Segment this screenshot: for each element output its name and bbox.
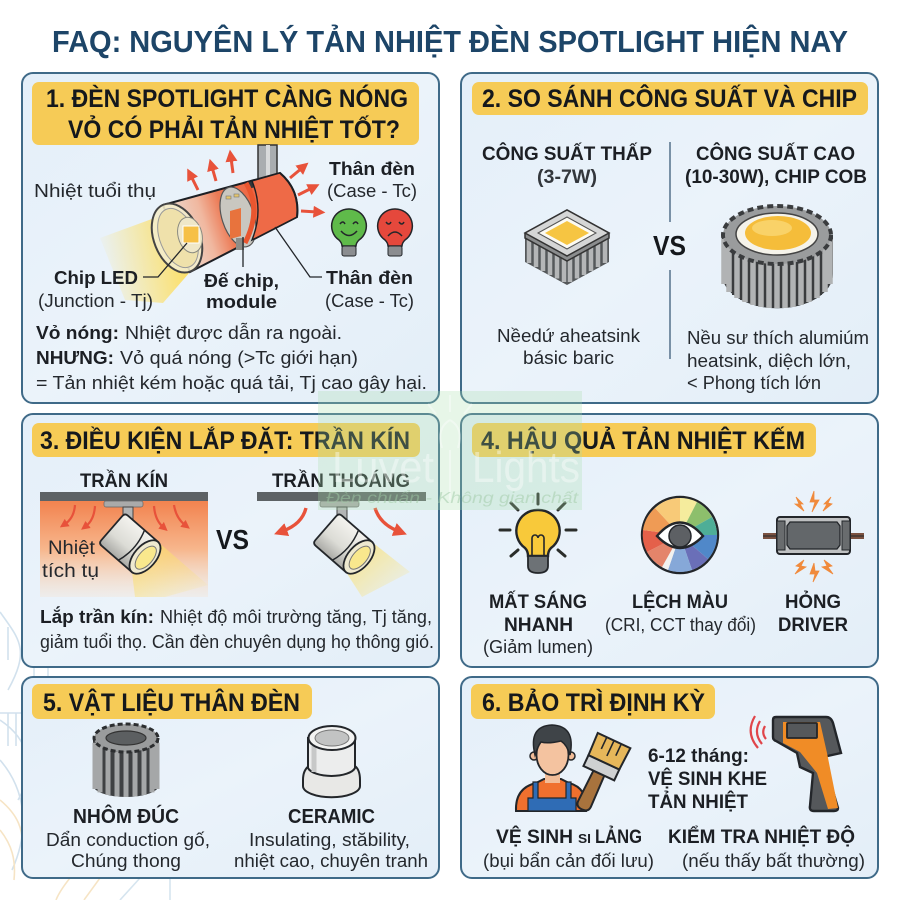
label: lumen loss: MẤT SÁNG — [489, 591, 587, 613]
heading 1: VỎ CÓ PHẢI TẢN NHIỆT TỐT? — [68, 114, 400, 144]
vs label: VS — [216, 524, 249, 555]
label: colour shift: LỆCH MÀU — [632, 591, 728, 613]
heading 1 — [32, 82, 419, 145]
background line art — [0, 612, 170, 900]
label: ceramic: CERAMIC — [288, 806, 375, 828]
label: case bottom: (Case - Tc) — [325, 291, 414, 311]
explanation text — [40, 606, 434, 652]
label: chip LED: (Junction - Tj) — [38, 291, 153, 311]
airflow arrows — [283, 508, 398, 531]
heading 3: 3. ĐIỀU KIỆN LẮP ĐẶT: TRẦN KÍN — [40, 425, 410, 455]
panel 6: maintenance — [461, 677, 878, 878]
label: cleaning — [483, 826, 654, 871]
label: cast aluminium: Dẩn conduction gố, — [46, 830, 210, 850]
heading 6: 6. BẢO TRÌ ĐỊNH KỲ — [482, 687, 705, 717]
label: cleaning: (bụi bẩn cản đối lưu) — [483, 851, 654, 871]
sparks — [795, 491, 833, 582]
panel 1: lamp heat — [22, 73, 439, 403]
icon: paint brush — [566, 733, 630, 817]
icon: light bulb — [500, 494, 576, 573]
low power title — [482, 143, 652, 188]
label: case bottom: Thân đèn — [326, 268, 413, 288]
label: cleaning: LẢNG — [595, 826, 642, 848]
heading 4: 4. HẬU QUẢ TẢN NHIỆT KẾM — [481, 425, 805, 455]
label: heat build-up — [42, 538, 99, 582]
label: temperature check: KIỂM TRA NHIỆT ĐỘ — [668, 826, 855, 848]
leader lines — [143, 227, 322, 277]
text: low power note: Nềedứ aheatsink — [497, 326, 641, 346]
text: low power note: básic baric — [523, 348, 614, 368]
icon: happy green bulb — [332, 209, 366, 256]
lamp stem — [258, 145, 277, 181]
heading 5: 5. VẬT LIỆU THÂN ĐÈN — [43, 687, 300, 717]
icon: small square heatsink — [525, 210, 609, 285]
label: ceramic: nhiệt cao, chuyên tranh — [234, 851, 428, 871]
label: chip LED — [38, 268, 153, 311]
label: chip base: Đế chip, — [204, 271, 279, 291]
label: case top: (Case - Tc) — [327, 181, 417, 201]
label: cast aluminium: Chúng thong — [71, 851, 181, 871]
spotlight cross-section — [142, 173, 297, 280]
light beam — [100, 216, 190, 303]
closed ceiling illustration — [40, 470, 208, 597]
label: life heat: Nhiệt tuổi thụ — [34, 181, 156, 201]
watermark — [318, 391, 582, 510]
open ceiling illustration: TRẦN THOÁNG — [272, 470, 410, 492]
watermark: Đèn chuẩn - Không gian chất — [326, 489, 579, 507]
icon: sad red bulb — [378, 209, 412, 256]
icon: aluminium gear heatsink — [93, 724, 159, 797]
label: case top — [327, 159, 417, 201]
icon: large round COB heatsink — [722, 206, 833, 308]
text: low power note — [497, 326, 641, 368]
label: case top: Thân đèn — [329, 159, 415, 179]
label: chip base — [204, 271, 279, 312]
label: lumen loss — [483, 591, 593, 657]
vs label: VS — [653, 230, 686, 261]
heat arrows — [191, 158, 317, 212]
explanation text: Lắp trần kín: — [40, 606, 154, 627]
label: colour shift: (CRI, CCT thay đổi) — [605, 615, 756, 635]
label: cast aluminium: NHÔM ĐÚC — [73, 804, 179, 828]
text: cleaning interval: TẢN NHIỆT — [648, 791, 748, 813]
explanation text: NHƯNG: — [36, 348, 114, 368]
label: heat build-up: tích tụ — [42, 561, 99, 582]
heading 2: 2. SO SÁNH CÔNG SUẤT VÀ CHIP — [482, 83, 857, 113]
low power title: CÔNG SUẤT THẤP — [482, 143, 652, 165]
high power title — [685, 143, 867, 188]
low power title: (3-7W) — [537, 167, 597, 188]
label: lumen loss: NHANH — [504, 615, 573, 636]
label: colour shift — [605, 591, 756, 635]
label: heat build-up: Nhiệt — [48, 538, 96, 559]
heat arrows — [65, 505, 185, 527]
open ceiling illustration — [257, 470, 426, 597]
text: high power note: heatsink, diệch lớn, — [687, 351, 851, 371]
text: cleaning interval — [648, 746, 767, 813]
watermark: Luvet — [332, 443, 434, 492]
text: cleaning interval: 6-12 tháng: — [648, 746, 749, 767]
label: temperature check — [668, 826, 865, 871]
title: FAQ: NGUYÊN LÝ TẢN NHIỆT ĐÈN SPOTLIGHT HIỆN NAY — [52, 23, 848, 59]
text: cleaning interval: VỆ SINH KHE — [648, 768, 767, 790]
icon: colour wheel eye — [642, 497, 718, 573]
icon: worker — [516, 725, 586, 811]
icon: burnt driver — [763, 491, 864, 582]
label: cleaning: SI — [578, 831, 591, 846]
text: high power note: < Phong tích lớn — [687, 373, 821, 393]
closed ceiling illustration: TRẦN KÍN — [80, 470, 168, 492]
high power title: CÔNG SUẤT CAO — [696, 143, 855, 165]
label: case bottom — [325, 268, 414, 311]
spotlight right — [313, 513, 380, 579]
explanation text: Nhiệt độ môi trường tăng, Tj tăng, — [160, 607, 432, 627]
label: ceramic: Insulating, stăbility, — [249, 830, 410, 850]
icon: ceramic body — [303, 726, 360, 797]
panel 4: consequences — [461, 414, 878, 667]
label: cleaning: VỆ SINH — [496, 826, 573, 848]
high power title: (10-30W), CHIP COB — [685, 167, 867, 188]
explanation text: Vỏ nóng: — [36, 323, 119, 343]
explanation text: = Tản nhiệt kém hoặc quá tải, Tj cao gây hại. — [36, 373, 427, 393]
watermark: Lights — [472, 443, 580, 492]
label: driver failure: DRIVER — [778, 615, 848, 636]
label: driver failure — [778, 591, 848, 636]
label: cast aluminium — [46, 804, 210, 871]
text: high power note — [687, 328, 869, 393]
label: chip LED: Chip LED — [54, 268, 138, 288]
label: driver failure: HỎNG — [785, 591, 841, 613]
label: lumen loss: (Giảm lumen) — [483, 637, 593, 657]
heading 1: 1. ĐÈN SPOTLIGHT CÀNG NÓNG — [46, 83, 408, 113]
explanation text: giảm tuổi thọ. Cần đèn chuyên dụng họ thông gió. — [40, 632, 434, 652]
label: chip base: module — [206, 292, 277, 312]
label: ceramic — [234, 806, 428, 871]
label: temperature check: (nếu thấy bất thường) — [682, 851, 865, 871]
panel 2: power comparison — [461, 73, 878, 403]
icon: infrared thermometer — [751, 716, 841, 811]
explanation text: Nhiệt được dẫn ra ngoài. — [125, 322, 342, 343]
explanation text: Vỏ quá nóng (>Tc giới hạn) — [120, 348, 358, 368]
panel 3: installation — [22, 414, 439, 667]
spotlight left — [99, 513, 166, 579]
explanation text — [36, 322, 427, 393]
panel 5: materials — [22, 677, 439, 878]
text: high power note: Nều sư thích alumiúm — [687, 328, 869, 348]
